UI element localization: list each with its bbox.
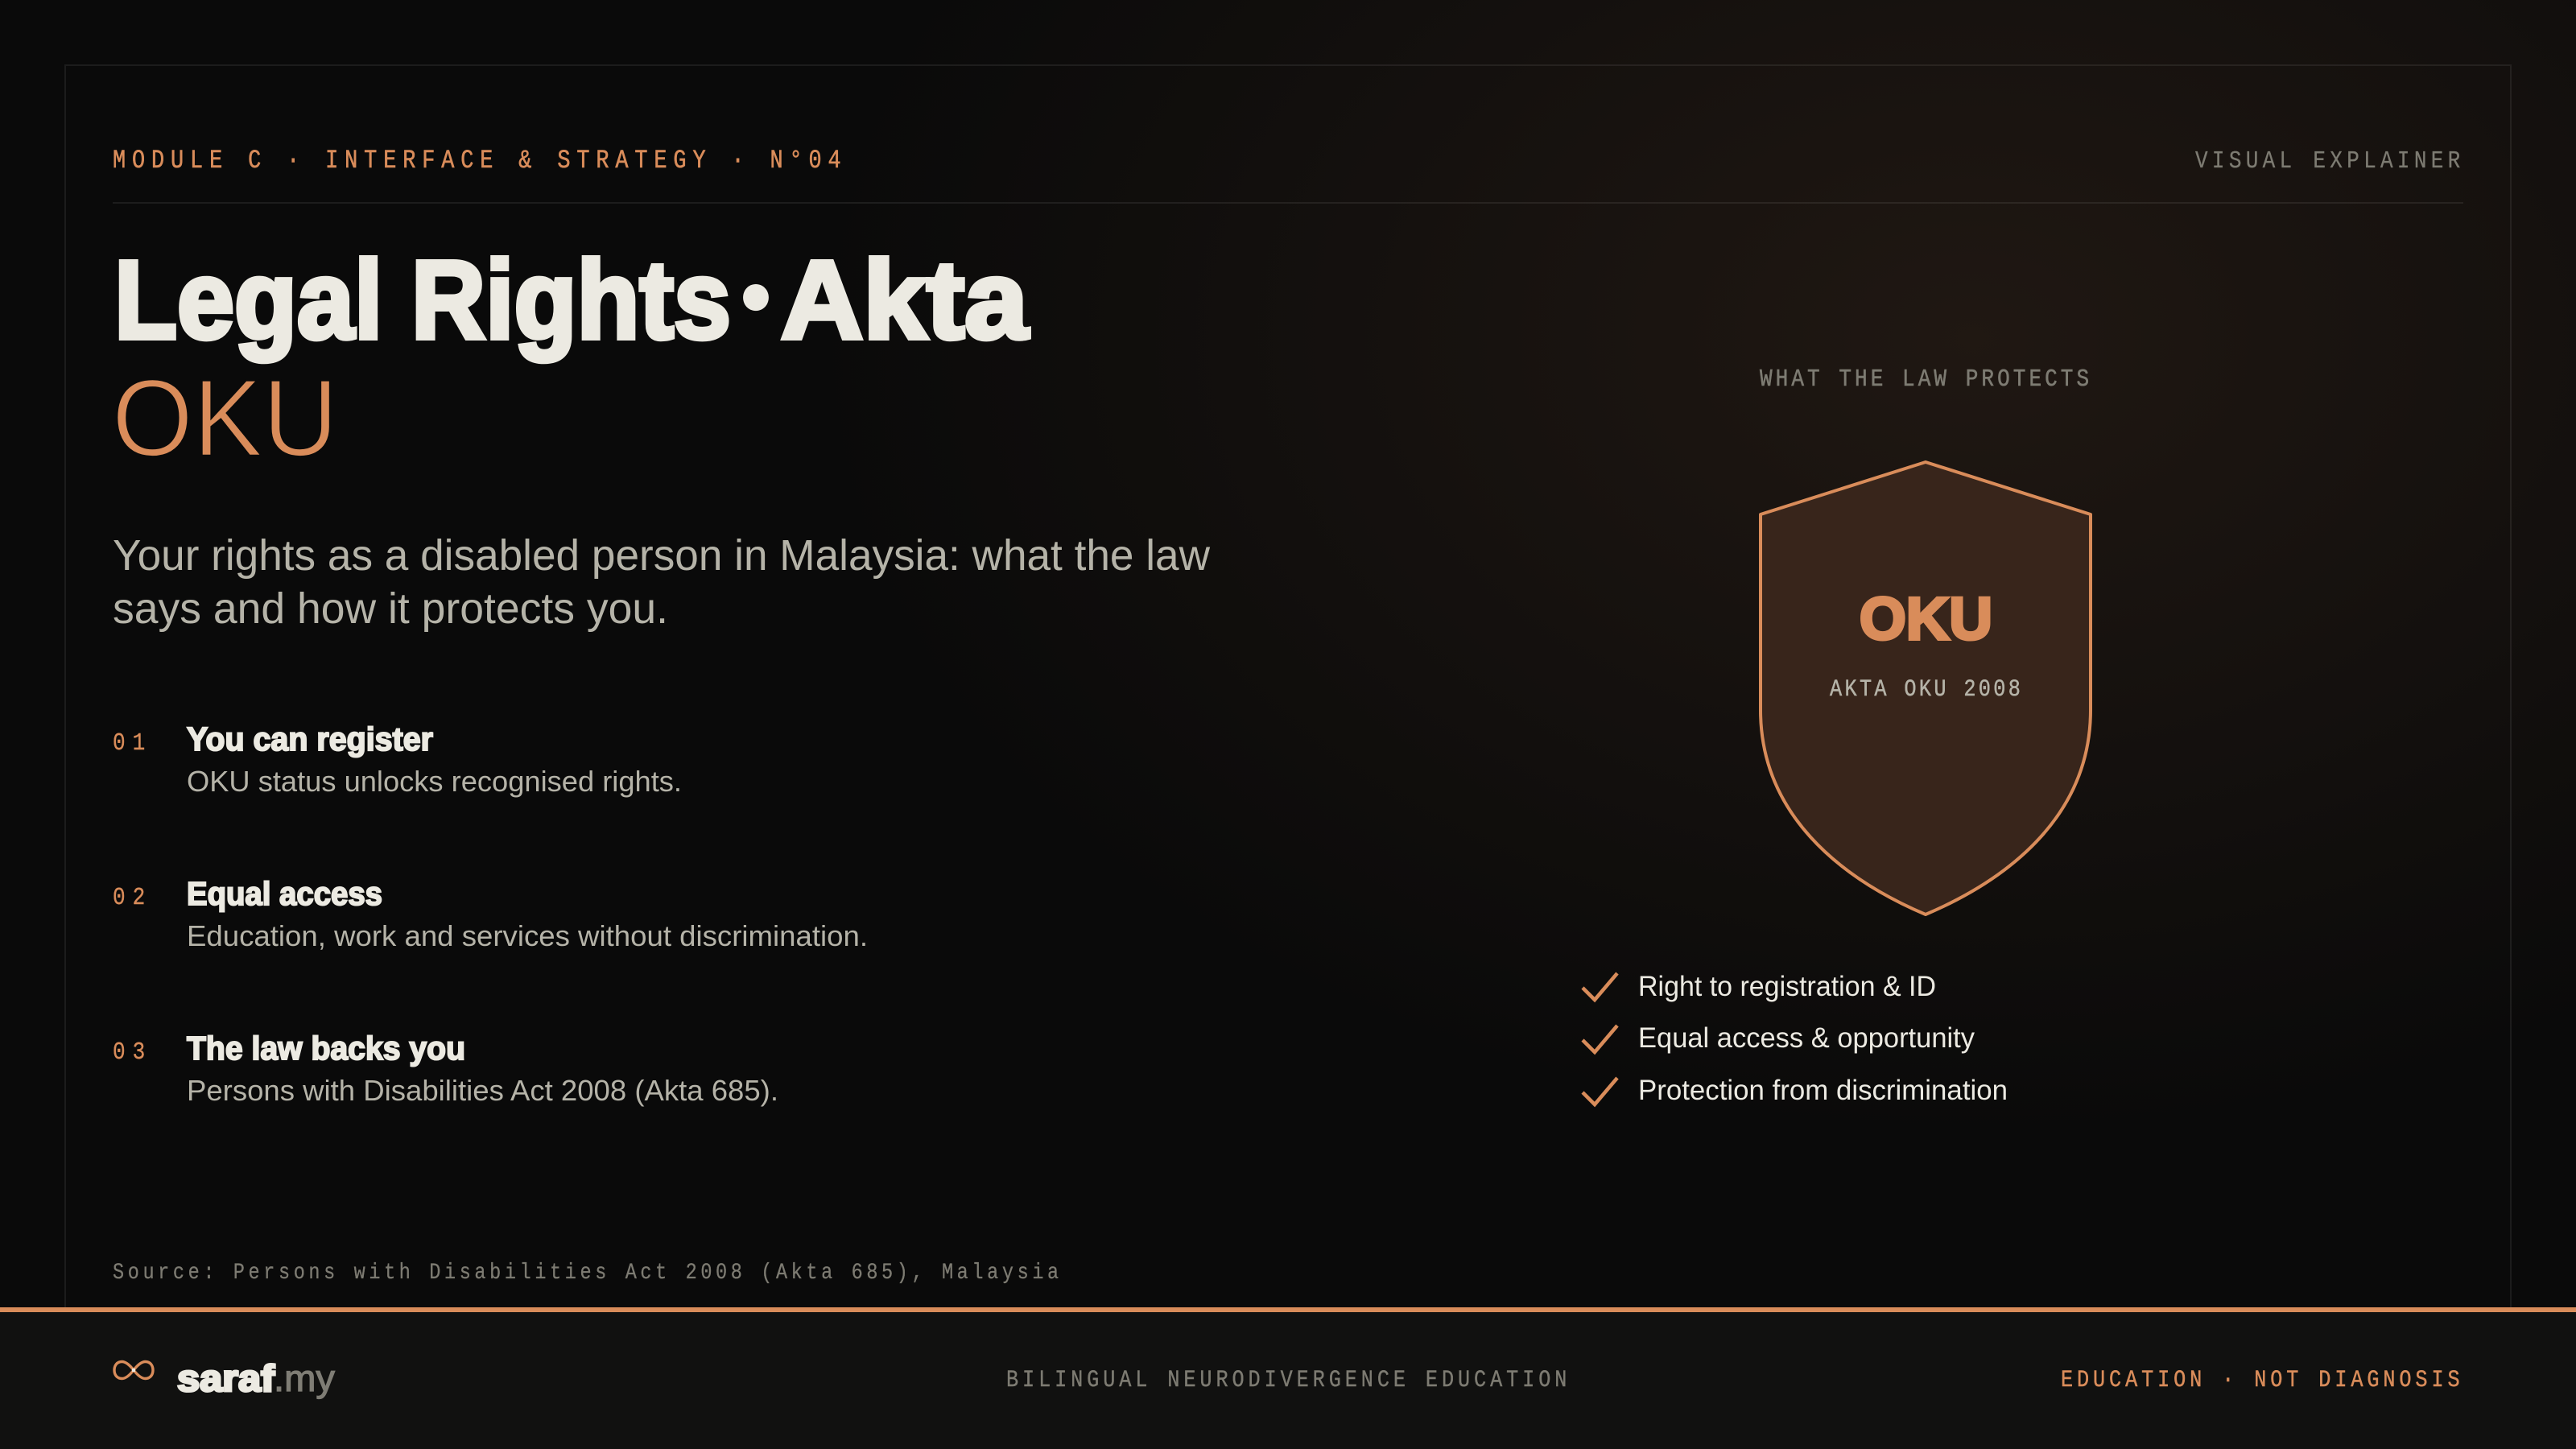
item title: Equal access: [187, 875, 382, 912]
check text 1: Right to registration & ID: [1638, 971, 1936, 1002]
item 03: [113, 1030, 778, 1107]
title: Legal Rights · Akta: Legal Rights: [114, 238, 731, 362]
title accent: OKU: OKU: [112, 357, 338, 479]
item description: Education, work and services without discrimination.: [187, 919, 868, 952]
icon: check: [1583, 1026, 1617, 1052]
check item 3: [1583, 1075, 2008, 1106]
subtitle: Your rights as a disabled person in Malaysia: what the law: [113, 531, 1211, 580]
shield label OKU: OKU: [1860, 585, 1992, 652]
check text 3: Protection from discrimination: [1638, 1075, 2008, 1106]
visual explainer tag: VISUAL EXPLAINER: [2195, 147, 2460, 175]
item description: Persons with Disabilities Act 2008 (Akta 685).: [187, 1074, 778, 1107]
icon: infinity loop: [114, 1362, 153, 1378]
module label: MODULE C · INTERFACE & STRATEGY · N°04: [113, 146, 841, 175]
subtitle: [113, 531, 1211, 633]
shield caption: AKTA OKU 2008: [1830, 676, 2021, 704]
item 02: [113, 875, 868, 952]
icon: check: [1583, 1078, 1617, 1104]
title block: [112, 204, 1029, 479]
brand wordmark: [177, 1357, 335, 1399]
number 03: 03: [113, 1038, 145, 1067]
item description: OKU status unlocks recognised rights.: [187, 765, 682, 798]
brand logo: [114, 1357, 335, 1399]
item title: You can register: [187, 720, 433, 758]
shield shape: [1761, 462, 2091, 914]
brand wordmark: saraf: [177, 1357, 275, 1399]
footer bar: [0, 1307, 2576, 1449]
check item 2: [1583, 1022, 1975, 1054]
shield badge: [1761, 462, 2091, 914]
number 01: 01: [113, 729, 145, 758]
item title: The law backs you: [187, 1030, 465, 1067]
subtitle: says and how it protects you.: [113, 584, 668, 633]
checklist: [1583, 971, 2008, 1106]
icon: check: [1583, 973, 1617, 1000]
check item 1: [1583, 971, 1936, 1002]
panel heading: WHAT THE LAW PROTECTS: [1760, 365, 2089, 394]
title: Legal Rights · Akta: [114, 204, 1029, 378]
item 01: [113, 720, 682, 798]
right panel: what the law protects: [1583, 365, 2091, 1106]
header bar: [113, 146, 2460, 175]
number 02: 02: [113, 883, 145, 912]
check text 2: Equal access & opportunity: [1638, 1022, 1975, 1054]
title: Legal Rights · Akta: Akta: [781, 238, 1029, 362]
footer disclaimer: EDUCATION · NOT DIAGNOSIS: [2061, 1367, 2460, 1394]
source note: Source: Persons with Disabilities Act 2008 (Akta 685), Malaysia: [113, 1259, 1059, 1286]
list of three rights: [113, 720, 868, 1107]
brand wordmark: .my: [274, 1357, 335, 1399]
footer center tagline: BILINGUAL NEURODIVERGENCE EDUCATION: [1006, 1367, 1567, 1394]
title: Legal Rights · Akta: ·: [719, 204, 793, 378]
